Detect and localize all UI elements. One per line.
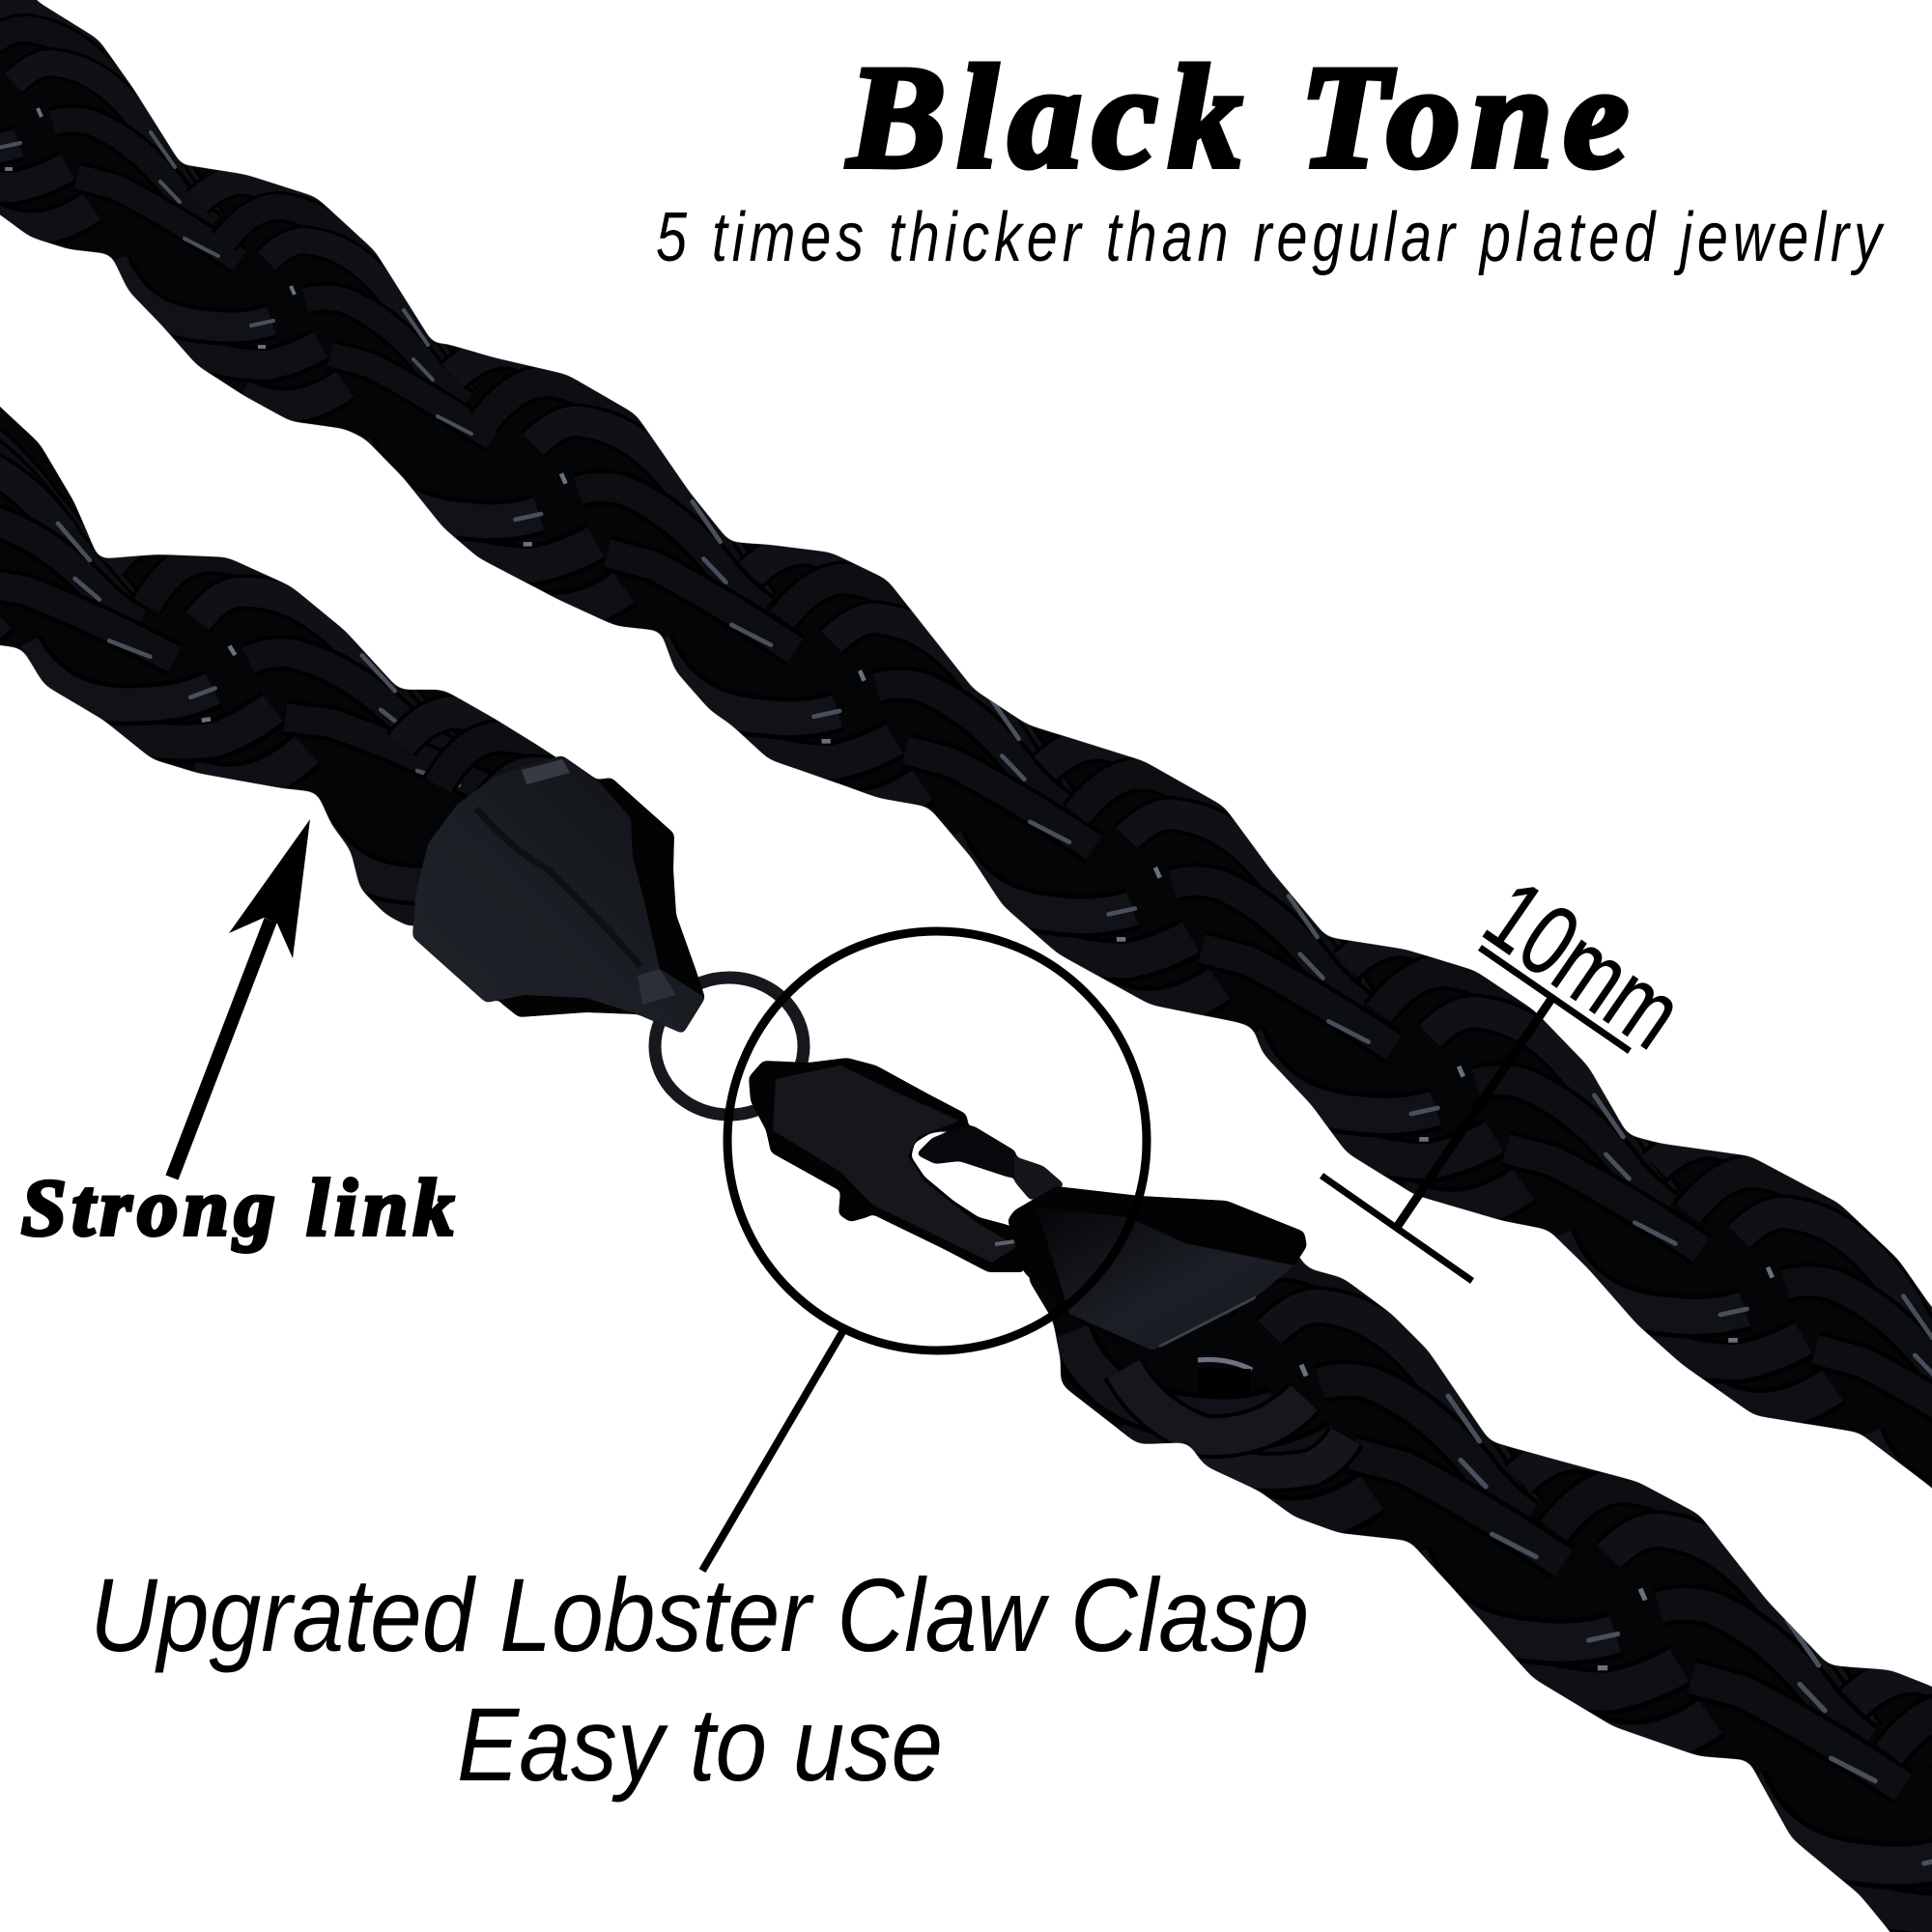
circle callout around clasp: [727, 931, 1147, 1350]
jump ring: [655, 978, 804, 1115]
10mm measurement lines: [1321, 948, 1630, 1281]
lobster claw clasp: [749, 1058, 1065, 1272]
arrow pointing to link: [172, 819, 310, 1178]
strong link label: Strong link: [21, 1163, 454, 1253]
leader line from circle to caption: [702, 1332, 842, 1571]
subtitle: 5 times thicker than regular plated jewelry: [656, 198, 1885, 275]
right end cap: [1008, 1186, 1307, 1350]
10mm label: 10mm: [1465, 859, 1701, 1070]
lower-left rope chain: [0, 406, 556, 925]
title: Black Tone: [846, 36, 1629, 198]
lower-right rope chain: [1024, 1227, 1932, 1932]
left end cap: [412, 755, 705, 1034]
caption line two: Easy to use: [457, 1686, 943, 1803]
caption line one: Upgrated Lobster Claw Clasp: [90, 1556, 1309, 1673]
